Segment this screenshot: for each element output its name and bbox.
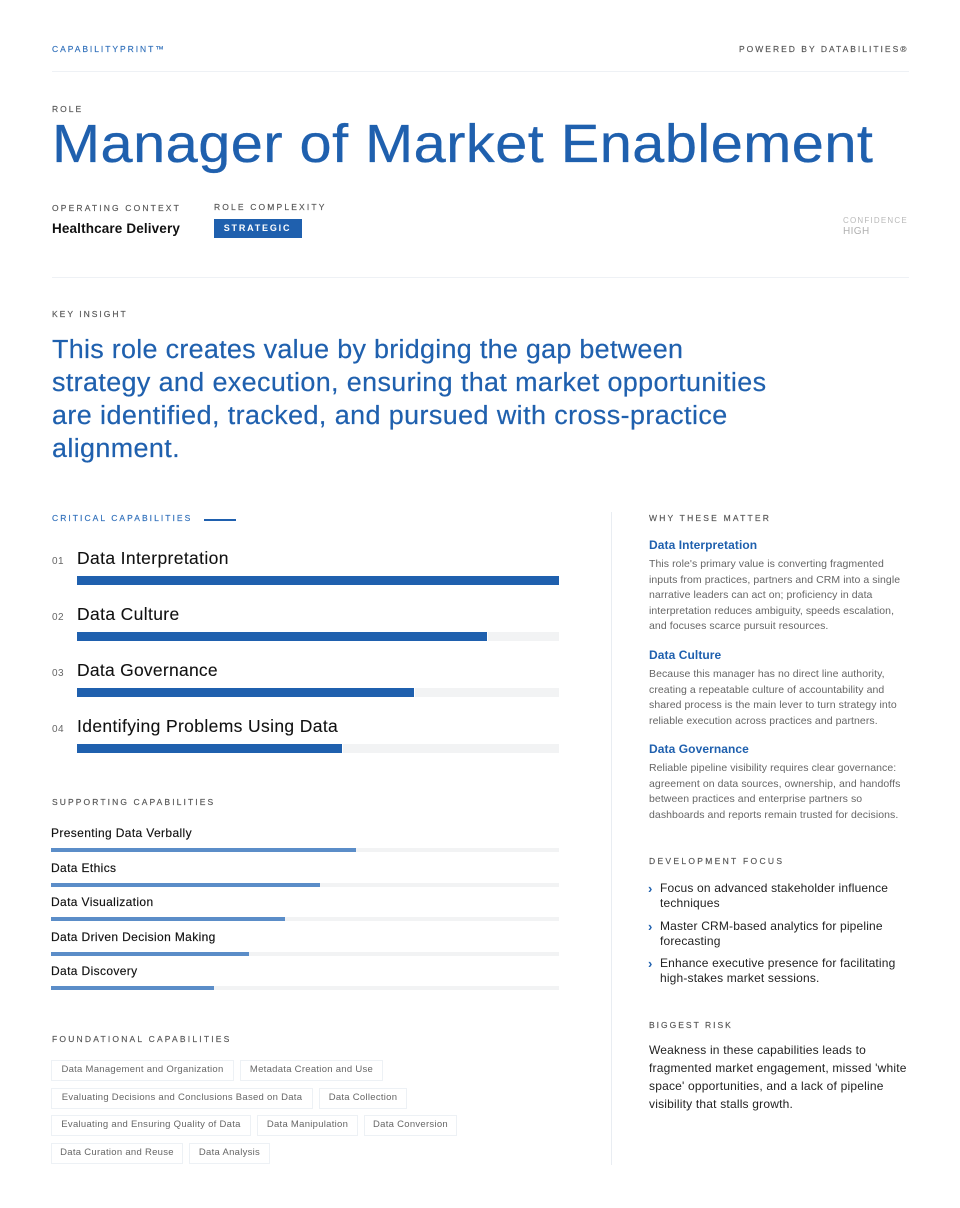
- why: data interpretation: [649, 538, 900, 632]
- name: Data Ethics: [51, 861, 116, 875]
- explanation: [649, 668, 897, 727]
- rank: 01: [52, 556, 64, 567]
- explanation: dashboards and reports remain trusted for decisions.: [649, 809, 898, 821]
- text: Enhance executive presence for facilitating: [660, 956, 895, 970]
- subheading: Data Governance: [649, 742, 749, 756]
- key insight text: strategy and execution, ensuring that market opportunities: [52, 369, 766, 397]
- key insight text: alignment.: [52, 435, 180, 463]
- operating context: [52, 203, 181, 236]
- operating context label: OPERATING CONTEXT: [52, 203, 181, 213]
- name: Data Driven Decision Making: [51, 930, 216, 944]
- explanation: Because this manager has no direct line authority,: [649, 668, 885, 680]
- accent rule: [204, 519, 236, 521]
- biggest risk label: BIGGEST RISK: [649, 1020, 733, 1030]
- name: Presenting Data Verbally: [51, 826, 192, 840]
- development item 2: [648, 919, 883, 948]
- role complexity: [214, 202, 327, 238]
- text: techniques: [660, 896, 720, 910]
- explanation: between practices and enterprise partners so: [649, 793, 862, 805]
- explanation: This role's primary value is converting fragmented: [649, 558, 884, 570]
- tag: Data Management and Organization: [61, 1064, 224, 1075]
- supporting capability 4: [51, 930, 559, 956]
- rank: 03: [52, 668, 64, 679]
- critical capability 2: [52, 604, 559, 641]
- development item 3: [648, 956, 895, 985]
- rank: 02: [52, 612, 64, 623]
- text: forecasting: [660, 934, 721, 948]
- tag: [257, 1115, 358, 1136]
- text: [660, 956, 895, 985]
- explanation: [649, 558, 900, 632]
- text: [660, 919, 883, 948]
- chevron: ›: [648, 881, 652, 896]
- biggest risk text: space' opportunities, and a lack of pipeline: [649, 1079, 884, 1093]
- confidence value: HIGH: [843, 226, 870, 237]
- tag: [240, 1060, 383, 1081]
- chevron: ›: [648, 956, 652, 971]
- tag: [51, 1088, 313, 1109]
- explanation: narrative leaders can act on; proficiency in data: [649, 589, 872, 601]
- tag: [51, 1143, 183, 1164]
- biggest risk text: Weakness in these capabilities leads to: [649, 1043, 866, 1057]
- rank: 04: [52, 724, 64, 735]
- text: [660, 881, 888, 910]
- foundational tags: [51, 1060, 457, 1164]
- bar: [77, 744, 559, 753]
- supporting capability 2: [51, 861, 559, 887]
- role complexity label: ROLE COMPLEXITY: [214, 202, 327, 212]
- key insight text: [52, 336, 766, 463]
- bar: [51, 883, 559, 887]
- development focus label: DEVELOPMENT FOCUS: [649, 856, 784, 866]
- tag: Data Curation and Reuse: [60, 1147, 174, 1158]
- bar: [51, 917, 559, 921]
- role label: ROLE: [52, 104, 83, 114]
- title: Manager of Market Enablement: [52, 115, 873, 174]
- tag: Data Analysis: [199, 1147, 260, 1158]
- bar: [77, 576, 559, 585]
- bar: [51, 986, 559, 990]
- text: Master CRM-based analytics for pipeline: [660, 919, 883, 933]
- strategic badge: STRATEGIC: [224, 223, 291, 233]
- explanation: [649, 762, 900, 821]
- biggest risk text: visibility that stalls growth.: [649, 1097, 793, 1111]
- explanation: agreement on data sources, ownership, and handoffs: [649, 778, 900, 790]
- critical label: CRITICAL CAPABILITIES: [52, 513, 192, 523]
- tag: [364, 1115, 457, 1136]
- name: Data Visualization: [51, 895, 154, 909]
- why these matter label: WHY THESE MATTER: [649, 513, 771, 523]
- tag: [51, 1060, 234, 1081]
- bar: [77, 632, 559, 641]
- header brand: CAPABILITYPRINT™: [52, 44, 166, 54]
- key insight label: KEY INSIGHT: [52, 309, 128, 319]
- why: data culture: [649, 648, 897, 727]
- supporting capability 5: [51, 964, 559, 990]
- confidence: [843, 216, 908, 237]
- explanation: inputs from practices, partners and CRM into a single: [649, 574, 900, 586]
- chevron: ›: [648, 919, 652, 934]
- key insight text: This role creates value by bridging the gap between: [52, 336, 683, 364]
- tag: [189, 1143, 270, 1164]
- confidence label: CONFIDENCE: [843, 216, 908, 225]
- tag: Metadata Creation and Use: [250, 1064, 373, 1075]
- biggest risk text: fragmented market engagement, missed 'white: [649, 1061, 907, 1075]
- tag: Data Manipulation: [267, 1119, 348, 1130]
- explanation: interpretation reduces ambiguity, speeds escalation,: [649, 605, 894, 617]
- tag: Data Conversion: [373, 1119, 448, 1130]
- tag: Data Collection: [329, 1092, 397, 1103]
- name: Data Governance: [77, 660, 218, 680]
- explanation: and focuses scarce pursuit resources.: [649, 620, 828, 632]
- tag: Evaluating and Ensuring Quality of Data: [61, 1119, 241, 1130]
- bar: [51, 952, 559, 956]
- operating context value: Healthcare Delivery: [52, 221, 180, 236]
- name: Data Discovery: [51, 964, 138, 978]
- text: Focus on advanced stakeholder influence: [660, 881, 888, 895]
- explanation: Reliable pipeline visibility requires clear governance:: [649, 762, 896, 774]
- bar: [77, 688, 559, 697]
- critical capability 1: [52, 548, 559, 585]
- why: data governance: [649, 742, 900, 821]
- critical capability 4: [52, 716, 559, 753]
- tag: [51, 1115, 251, 1136]
- explanation: reliable execution across practices and partners.: [649, 715, 878, 727]
- header powered by: POWERED BY DATABILITIES®: [739, 44, 909, 54]
- supporting capabilities label: SUPPORTING CAPABILITIES: [52, 797, 215, 807]
- explanation: creating a repeatable culture of accountability and: [649, 684, 884, 696]
- key insight text: are identified, tracked, and pursued with cross-practice: [52, 402, 728, 430]
- strategic badge: [214, 219, 302, 238]
- name: Identifying Problems Using Data: [77, 716, 338, 736]
- subheading: Data Culture: [649, 648, 721, 662]
- supporting capability 3: [51, 895, 559, 921]
- subheading: Data Interpretation: [649, 538, 757, 552]
- tag: Evaluating Decisions and Conclusions Based on Data: [62, 1092, 302, 1103]
- development item 1: [648, 881, 888, 910]
- text: high-stakes market sessions.: [660, 971, 820, 985]
- critical capability 3: [52, 660, 559, 697]
- bar: [51, 848, 559, 852]
- supporting capability 1: [51, 826, 559, 852]
- foundational capabilities label: FOUNDATIONAL CAPABILITIES: [52, 1034, 232, 1044]
- biggest risk text: [649, 1043, 907, 1111]
- tag: [319, 1088, 407, 1109]
- explanation: shared process is the main lever to turn strategy into: [649, 699, 897, 711]
- name: Data Interpretation: [77, 548, 229, 568]
- name: Data Culture: [77, 604, 180, 624]
